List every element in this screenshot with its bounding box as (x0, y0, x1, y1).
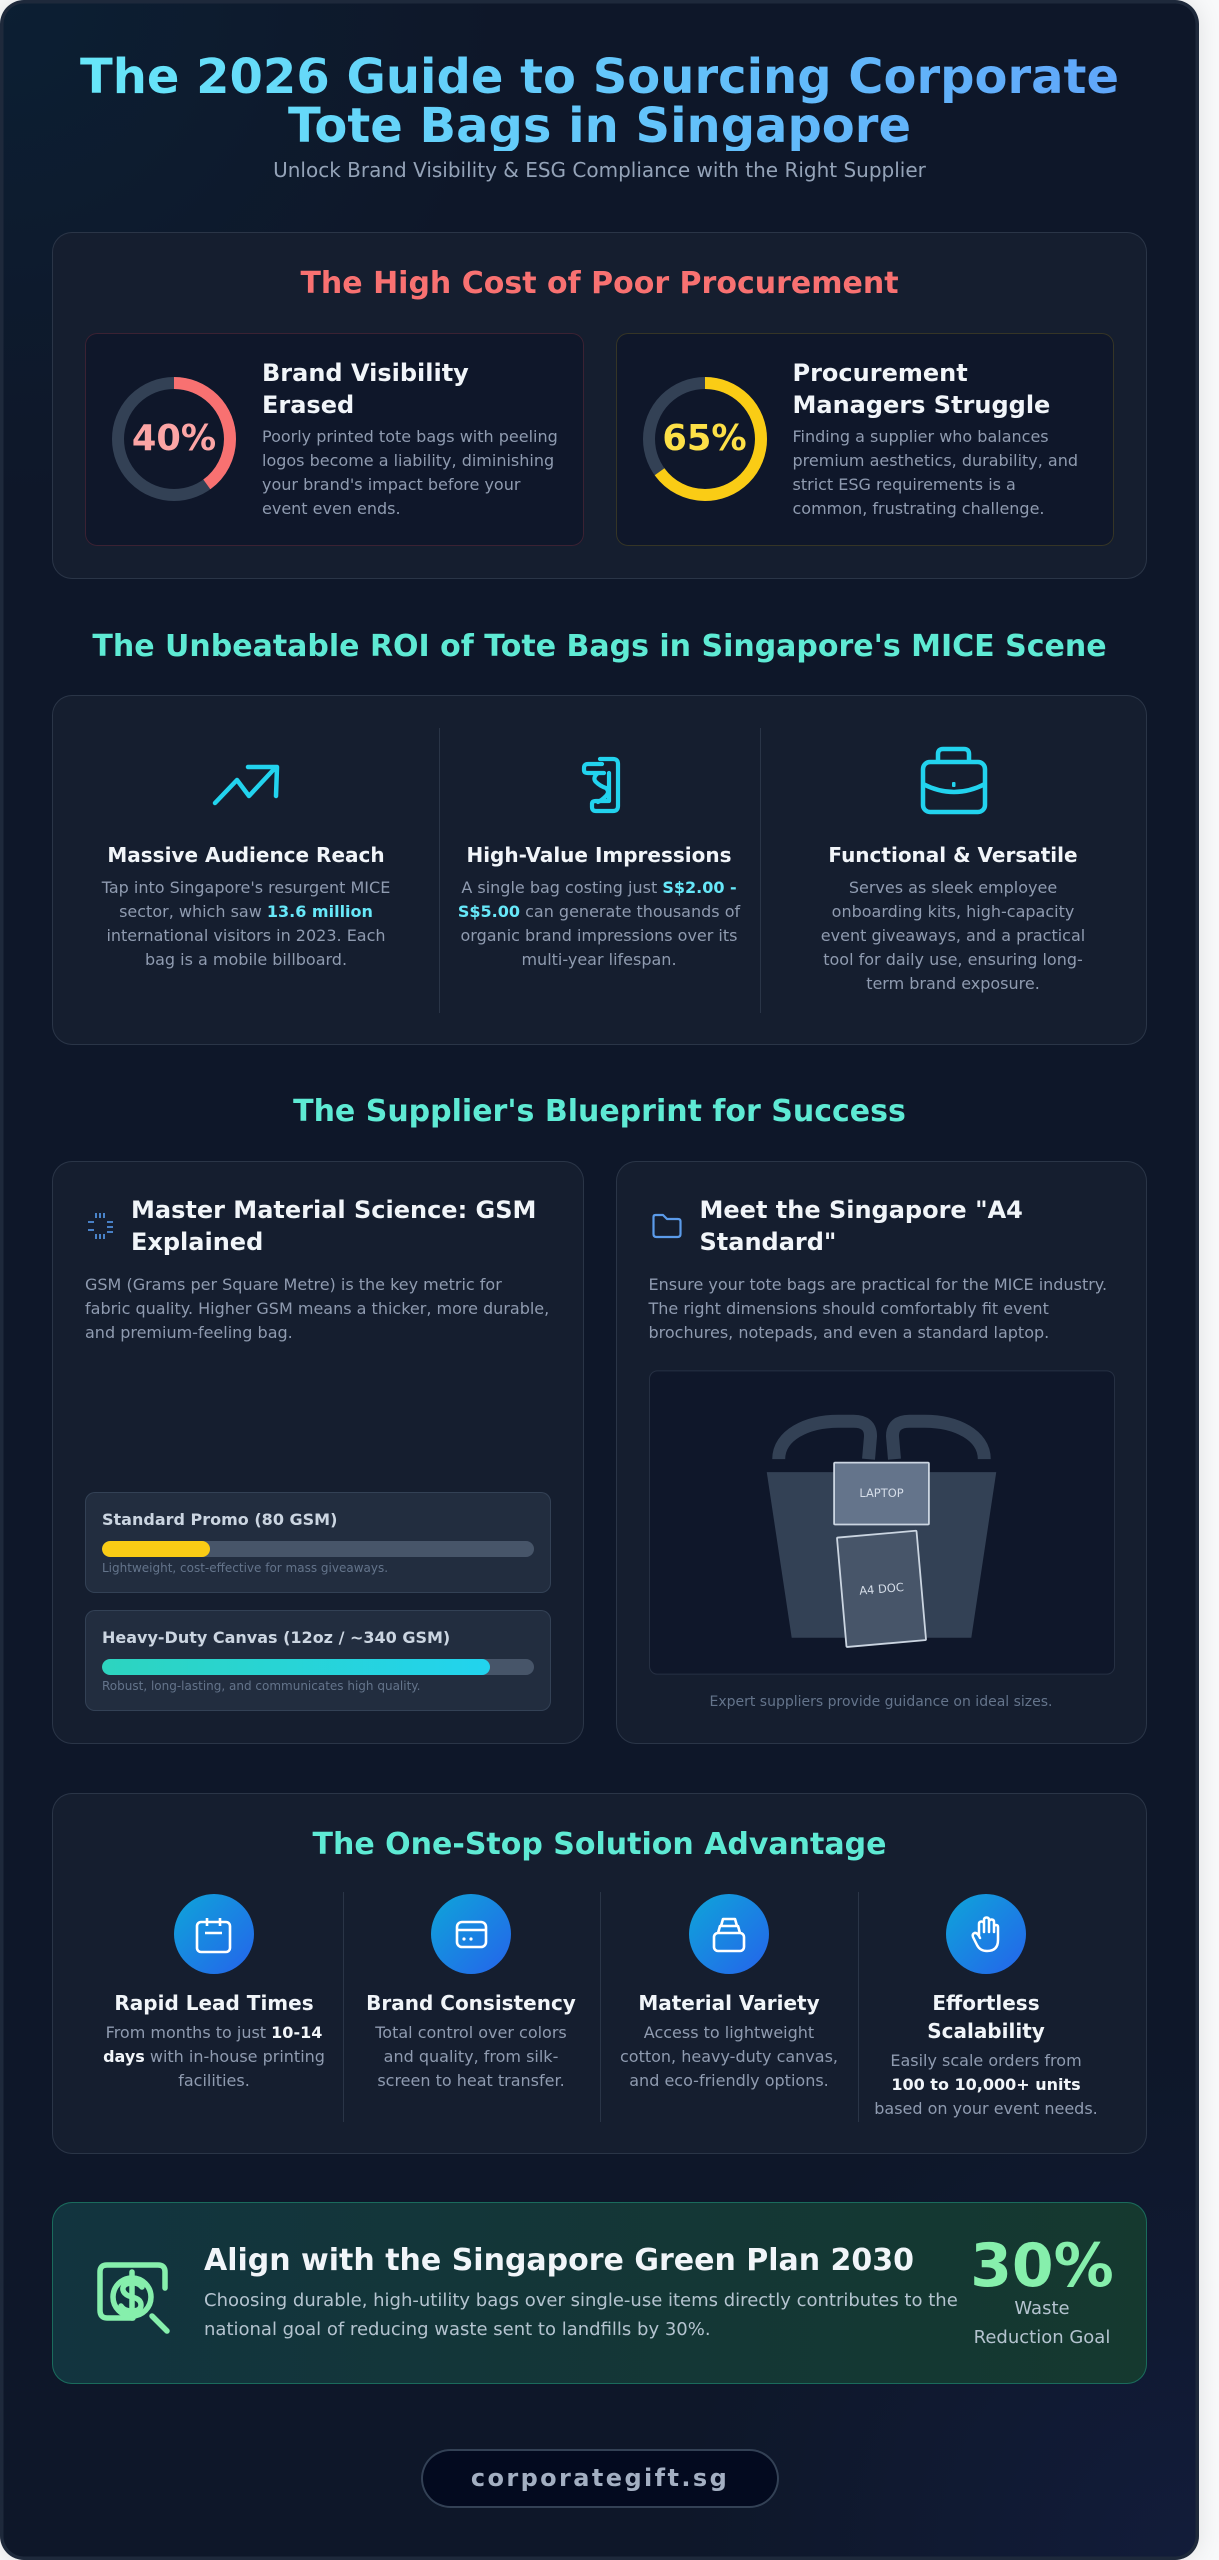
stat label: Waste (1014, 2298, 1070, 2319)
illustration: tote bag with laptop and A4 document (649, 1370, 1115, 1674)
benefit text: From months to just 10-14 (106, 2023, 322, 2042)
column text: organic brand impressions over its (460, 926, 737, 945)
card title (131, 1196, 536, 1256)
benefit title: Brand Consistency (366, 1991, 576, 2015)
card title: Brand Visibility (262, 359, 469, 387)
panel: the high cost of poor procurement (52, 232, 1147, 579)
footer: website pill (421, 2449, 779, 2508)
card text: your brand's impact before your (262, 475, 520, 494)
card title: Meet the Singapore "A4 (700, 1196, 1023, 1224)
icon: folder (652, 1214, 682, 1238)
panel: A4 standard (616, 1161, 1147, 1744)
benefit: material variety (620, 1991, 838, 2090)
card title (262, 359, 469, 419)
column text: tool for daily use, ensuring long- (823, 950, 1083, 969)
icon: briefcase (920, 746, 988, 814)
column: functional and versatile (821, 843, 1085, 993)
benefit text: and eco-friendly options. (629, 2071, 829, 2090)
panel: GSM explained (52, 1161, 584, 1744)
heading: unbeatable ROI: The Unbeatable ROI of Tote Bags in Singapore's MICE Scene (92, 628, 1107, 664)
column text (458, 878, 740, 969)
column text: A single bag costing just S$2.00 - (461, 878, 737, 897)
card text: Poorly printed tote bags with peeling (262, 427, 558, 446)
benefit text: Access to lightweight (644, 2023, 814, 2042)
card title (700, 1196, 1023, 1256)
chart: 65 percent ring (643, 377, 767, 501)
card text (85, 1275, 549, 1342)
card title: Managers Struggle (792, 391, 1050, 419)
icon: calendar (174, 1894, 254, 1974)
benefit text (375, 2023, 567, 2090)
card text: Finding a supplier who balances (792, 427, 1049, 446)
banner text: national goal of reducing waste sent to landfills by 30%. (204, 2318, 711, 2340)
title (60, 53, 1139, 151)
column text: event giveaways, and a practical (821, 926, 1085, 945)
column text (821, 878, 1085, 993)
benefit text (103, 2023, 325, 2090)
column text: onboarding kits, high-capacity (832, 902, 1074, 921)
card text: GSM (Grams per Square Metre) is the key metric for (85, 1275, 502, 1294)
card text: common, frustrating challenge. (792, 499, 1045, 518)
column title: Massive Audience Reach (107, 843, 385, 867)
footer: website pill: corporategift.sg (471, 2464, 729, 2492)
benefit: brand consistency (366, 1991, 576, 2090)
subtitle: Unlock Brand Visibility & ESG Compliance with the Right Supplier (273, 158, 926, 182)
stat: 40%: 40% (132, 418, 216, 459)
benefit text: Easily scale orders from (890, 2051, 1082, 2070)
gauge label: Standard Promo (80 GSM) (102, 1510, 337, 1529)
icon: credit card (431, 1894, 511, 1974)
card text (792, 427, 1078, 518)
title: The 2026 Guide to Sourcing Corporate (80, 49, 1119, 105)
card text: The right dimensions should comfortably fit event (648, 1299, 1049, 1318)
column text: Serves as sleek employee (849, 878, 1057, 897)
icon: hand (946, 1894, 1026, 1974)
gauge note: Lightweight, cost-effective for mass giveaways. (102, 1561, 388, 1575)
card: procurement managers struggle (616, 333, 1114, 546)
card title: Master Material Science: GSM (131, 1196, 536, 1224)
banner text: Choosing durable, high-utility bags over single-use items directly contributes to the (204, 2290, 958, 2311)
benefit text: facilities. (178, 2071, 250, 2090)
card text: logos become a liability, diminishing (262, 451, 554, 470)
gauge: heavy-duty canvas (85, 1610, 551, 1711)
chart: 40 percent ring (112, 377, 236, 501)
card text: premium aesthetics, durability, and (792, 451, 1078, 470)
banner text (204, 2290, 958, 2340)
column text: Tap into Singapore's resurgent MICE (102, 878, 390, 897)
column text: multi-year lifespan. (521, 950, 677, 969)
column title: High-Value Impressions (466, 843, 732, 867)
benefit text (874, 2051, 1098, 2118)
card title: Explained (131, 1228, 263, 1256)
card text (648, 1275, 1107, 1342)
icon: dollar magnifier (97, 2262, 170, 2334)
benefit text: Total control over colors (375, 2023, 567, 2042)
illustration: tote bag with laptop and A4 document: A4 DOC (858, 1580, 904, 1598)
heading: supplier's blueprint: The Supplier's Blueprint for Success (293, 1094, 906, 1128)
column: high-value impressions (458, 843, 740, 969)
card title (792, 359, 1050, 419)
benefit title: Effortless (932, 1991, 1040, 2015)
card title: Erased (262, 391, 354, 419)
column text: S$5.00 can generate thousands of (458, 902, 740, 921)
card text: event even ends. (262, 499, 401, 518)
benefit text (620, 2023, 838, 2090)
benefit: rapid lead times (103, 1991, 325, 2090)
benefit text: cotton, heavy-duty canvas, (620, 2047, 838, 2066)
heading: high cost: The High Cost of Poor Procurement (300, 266, 899, 300)
card title: Procurement (792, 359, 968, 387)
panel: one-stop solution advantage (52, 1793, 1147, 2154)
gauge label: Heavy-Duty Canvas (12oz / ~340 GSM) (102, 1628, 450, 1647)
column text: term brand exposure. (866, 974, 1040, 993)
card text: Ensure your tote bags are practical for the MICE industry. (648, 1275, 1107, 1294)
column text (102, 878, 390, 969)
banner title: Align with the Singapore Green Plan 2030 (204, 2243, 914, 2278)
icon: fabric weave (88, 1213, 113, 1239)
stat: 30 percent waste reduction (970, 2231, 1114, 2348)
heading: one-stop solution: The One-Stop Solution Advantage (313, 1826, 886, 1862)
icon: trending up (212, 764, 280, 806)
card text: fabric quality. Higher GSM means a thicker, more durable, (85, 1299, 549, 1318)
gauge bar (102, 1541, 534, 1557)
panel: Singapore Green Plan 2030 (52, 2202, 1147, 2384)
benefit title: Material Variety (638, 1991, 820, 2015)
benefit text: screen to heat transfer. (377, 2071, 565, 2090)
illustration: tote bag with laptop and A4 document: LAPTOP (859, 1486, 903, 1500)
gauge note: Robust, long-lasting, and communicates high quality. (102, 1679, 420, 1693)
card text: brochures, notepads, and even a standard laptop. (648, 1323, 1049, 1342)
title: Tote Bags in Singapore (288, 98, 911, 154)
card title: Standard" (700, 1228, 836, 1256)
benefit text: days with in-house printing (103, 2047, 325, 2066)
panel: ROI (52, 695, 1147, 1045)
caption: Expert suppliers provide guidance on ideal sizes. (709, 1694, 1053, 1710)
benefit title (927, 1991, 1045, 2043)
column text: bag is a mobile billboard. (145, 950, 347, 969)
benefit text: 100 to 10,000+ units (891, 2075, 1081, 2094)
column: massive audience reach (102, 843, 390, 969)
card text: strict ESG requirements is a (792, 475, 1016, 494)
benefit title: Rapid Lead Times (114, 1991, 314, 2015)
benefit text: and quality, from silk- (384, 2047, 558, 2066)
icon: banknote (582, 756, 620, 814)
card: brand visibility erased (85, 333, 584, 546)
benefit title: Scalability (927, 2019, 1045, 2043)
icon: layered material (689, 1894, 769, 1974)
stat label: Reduction Goal (974, 2326, 1110, 2348)
column title: Functional & Versatile (828, 843, 1078, 867)
stat label (974, 2298, 1110, 2348)
card text: and premium-feeling bag. (85, 1323, 293, 1342)
card text (262, 427, 558, 518)
gauge bar (102, 1659, 534, 1675)
gauge: standard promo (85, 1492, 551, 1593)
benefit text: based on your event needs. (874, 2099, 1098, 2118)
stat number: 30% (970, 2231, 1114, 2301)
stat: 65%: 65% (662, 418, 747, 459)
benefit: effortless scalability (874, 1991, 1098, 2118)
column text: international visitors in 2023. Each (106, 926, 386, 945)
column text: sector, which saw 13.6 million (119, 902, 373, 921)
